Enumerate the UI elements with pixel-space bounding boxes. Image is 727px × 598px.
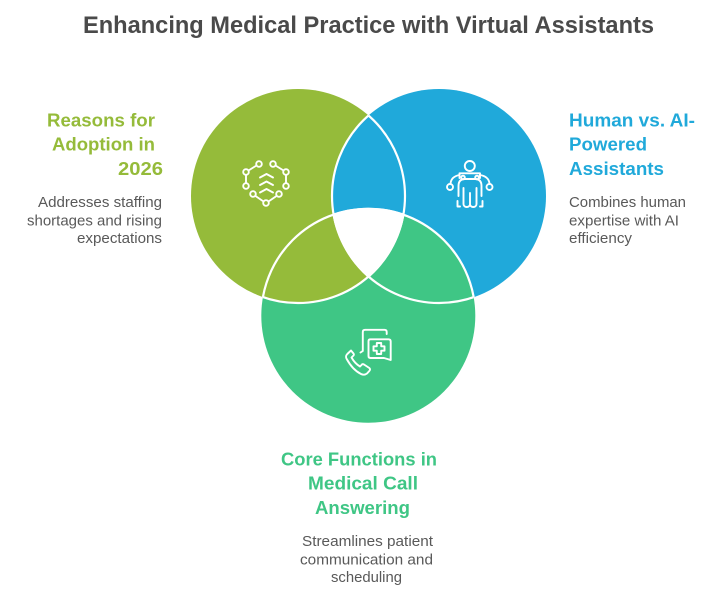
description: core functions: [300, 534, 433, 586]
description: human vs AI assistants: efficiency: [569, 231, 633, 247]
heading: core functions: Answering: [315, 497, 410, 518]
heading: reasons for adoption: [47, 110, 163, 179]
description: human vs AI assistants: expertise with AI: [569, 213, 679, 229]
circle: reasons for adoption: [191, 89, 405, 303]
venn diagram: [191, 89, 546, 423]
circle: human vs AI assistants: [332, 89, 546, 303]
heading: core functions: [281, 448, 437, 518]
heading: reasons for adoption: Adoption in: [52, 134, 155, 154]
title: Enhancing Medical Practice with Virtual Assistants: [83, 12, 654, 39]
circle: core functions: [261, 209, 475, 423]
description: reasons for adoption: expectations: [77, 231, 162, 247]
description: human vs AI assistants: [569, 195, 686, 247]
text block: core functions: [281, 448, 437, 586]
heading: human vs AI assistants: Assistants: [569, 158, 664, 179]
icon: network with chevrons: [243, 161, 289, 206]
heading: human vs AI assistants: Human vs. AI-: [569, 110, 695, 130]
heading: core functions: Core Functions in: [281, 448, 437, 470]
description: reasons for adoption: [27, 195, 162, 247]
overlap: reasons and core functions: [264, 216, 366, 302]
heading: reasons for adoption: Reasons for: [47, 110, 155, 130]
description: reasons for adoption: Addresses staffing: [38, 195, 162, 211]
description: reasons for adoption: shortages and rising: [27, 213, 162, 229]
circle outlines: [262, 114, 475, 304]
overlap: centre: [335, 210, 402, 275]
description: human vs AI assistants: Combines human: [569, 195, 686, 211]
text block: reasons for adoption: [27, 110, 163, 247]
text block: human vs AI assistants: [569, 110, 695, 247]
description: core functions: scheduling: [331, 570, 402, 586]
icon: human with AI nodes: [447, 161, 492, 207]
heading: human vs AI assistants: [569, 110, 695, 179]
description: core functions: Streamlines patient: [302, 534, 433, 550]
heading: reasons for adoption: 2026: [118, 158, 163, 179]
icon: phone and medical chat: [346, 330, 391, 375]
heading: core functions: Medical Call: [308, 472, 418, 494]
heading: human vs AI assistants: Powered: [569, 134, 647, 154]
description: core functions: communication and: [300, 552, 433, 568]
